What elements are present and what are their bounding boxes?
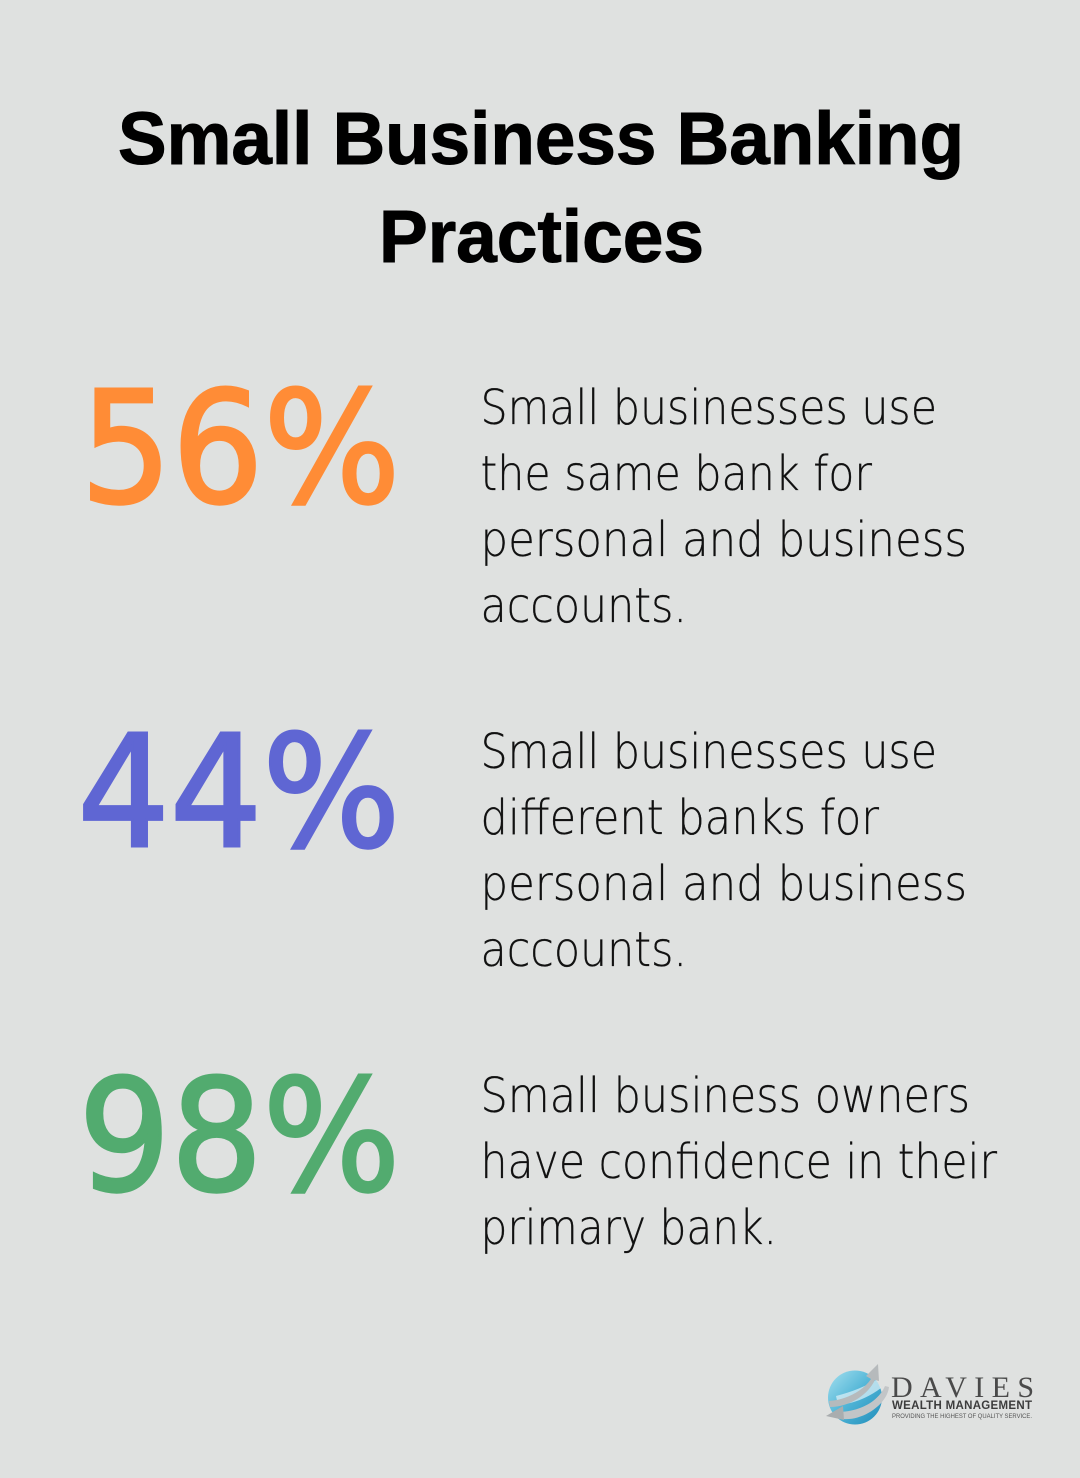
icon: globe with arrows [826, 1364, 889, 1424]
stat description: same bank: personal and business [480, 512, 967, 568]
stat description: same bank: the same bank for [480, 446, 872, 502]
stat description: different banks: Small businesses use [480, 724, 937, 780]
stat description: different banks: personal and business [480, 856, 967, 912]
stat description: same bank: accounts. [480, 578, 687, 634]
stat description: confidence: have confidence in their [480, 1134, 997, 1190]
stat row: 44% [77, 702, 967, 978]
logo subtitle: WEALTH MANAGEMENT [892, 1400, 1032, 1412]
title: Practices [379, 195, 704, 278]
stat value: 98%: 98% [78, 1046, 400, 1227]
logo: Davies Wealth Management [826, 1364, 1034, 1424]
stat description: same bank [480, 380, 967, 634]
stat description: confidence: primary bank. [480, 1200, 777, 1256]
stat row: 98% [78, 1046, 997, 1256]
title: Small Business Banking [118, 97, 964, 180]
stat description: confidence [480, 1068, 997, 1256]
stat description: confidence: Small business owners [480, 1068, 970, 1124]
stat description: same bank: Small businesses use [480, 380, 937, 436]
stat description: different banks: different banks for [480, 790, 879, 846]
logo tagline: PROVIDING THE HIGHEST OF QUALITY SERVICE. [892, 1413, 1032, 1420]
logo wordmark: DAVIES [891, 1371, 1034, 1404]
stat value: 56%: 56% [80, 358, 400, 539]
stat description: different banks [480, 724, 967, 978]
stat description: different banks: accounts. [480, 922, 687, 978]
stat value: 44%: 44% [77, 702, 400, 883]
title [118, 97, 964, 278]
stat row: 56% [80, 358, 967, 634]
